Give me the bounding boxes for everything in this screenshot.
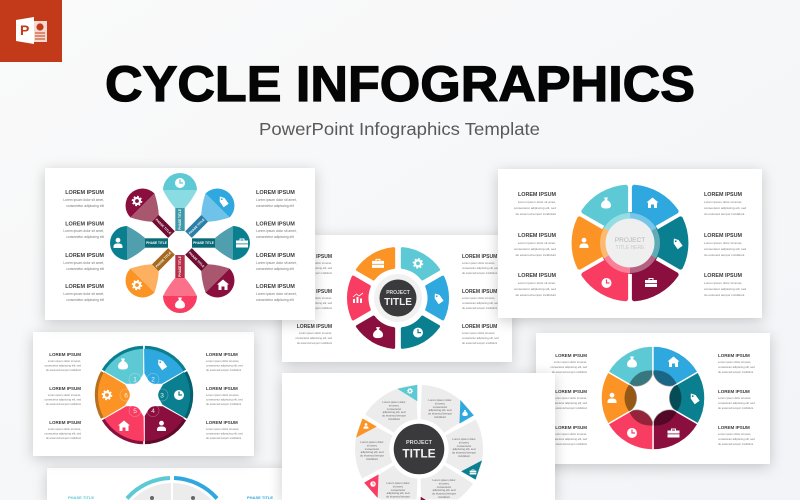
- wheel: [94, 339, 194, 451]
- wedge copy: adipiscing elit, sed: [453, 447, 476, 451]
- left labels: consectetur adipiscing elit: [66, 298, 104, 302]
- right labels: Lorem ipsum dolor sit amet,: [704, 200, 742, 204]
- cyan arc: [127, 478, 170, 498]
- left labels: do eiusmod tempor incididunt: [46, 402, 81, 406]
- segment blue: [638, 340, 702, 397]
- petal E teal: [192, 226, 250, 260]
- panel: title-here cycle, upper right: [498, 169, 762, 318]
- left labels: [295, 254, 332, 345]
- wheel: [574, 182, 686, 304]
- wedge copy: incididunt: [438, 495, 450, 499]
- right labels: Lorem ipsum dolor sit amet,: [718, 432, 751, 436]
- left labels: Lorem ipsum dolor sit amet,: [63, 198, 104, 202]
- left labels: consectetur adipiscing elit, sed: [44, 364, 81, 368]
- phase titles: PHASE TITLE: [155, 218, 172, 235]
- right labels: consectetur adipiscing elit: [256, 267, 294, 271]
- wedge copy: Lorem ipsum dolor: [428, 398, 452, 402]
- wedge copy: do eiusmod tempor: [386, 495, 410, 499]
- panel: project title cycle, centre: [282, 235, 512, 362]
- segment blue: [609, 182, 679, 255]
- left labels: LOREM IPSUM: [518, 192, 556, 198]
- numbers and icons: 2: [151, 377, 155, 384]
- left labels: Lorem ipsum dolor sit amet,: [48, 393, 81, 397]
- right labels: consectetur adipiscing elit, sed: [206, 398, 243, 402]
- left labels: consectetur adipiscing elit, sed: [44, 432, 81, 436]
- segment teal: [669, 372, 705, 424]
- right labels: LOREM IPSUM: [206, 386, 238, 391]
- left labels: do eiusmod tempor incididunt: [297, 306, 332, 310]
- right labels: consectetur adipiscing elit, sed: [462, 301, 499, 305]
- wedge copy: sit amet,: [393, 484, 404, 488]
- left labels: Lorem ipsum dolor sit amet,: [299, 331, 332, 335]
- right labels: Lorem ipsum dolor sit amet,: [704, 281, 742, 285]
- panel: phase arcs, bottom left: [47, 468, 287, 500]
- card: [498, 169, 762, 318]
- right labels: LOREM IPSUM: [256, 222, 295, 228]
- petal NW maroon: [118, 181, 184, 247]
- left labels: Lorem ipsum dolor sit amet,: [299, 296, 332, 300]
- wedge copy: do eiusmod tempor: [452, 451, 476, 455]
- left labels: do eiusmod tempor incididunt: [552, 442, 587, 446]
- left labels: Lorem ipsum dolor sit amet,: [48, 427, 81, 431]
- phase titles: [146, 209, 214, 277]
- wedge copy: Lorem ipsum dolor: [382, 400, 406, 404]
- left labels: Lorem ipsum dolor sit amet,: [518, 200, 556, 204]
- numbers and icons: 5: [133, 408, 137, 415]
- wedge copy: sit amet,: [439, 481, 450, 485]
- wedge copy: incididunt: [366, 457, 378, 461]
- right labels: Lorem ipsum dolor sit amet,: [256, 229, 297, 233]
- left labels: do eiusmod tempor incididunt: [297, 341, 332, 345]
- wedge copy: adipiscing elit, sed: [387, 491, 410, 495]
- right labels: [256, 190, 297, 302]
- numbers and icons: 3: [160, 392, 164, 399]
- segment cyan: [394, 245, 441, 284]
- right labels: consectetur adipiscing elit, sed: [718, 401, 755, 405]
- left labels: [550, 353, 587, 446]
- left labels: LOREM IPSUM: [49, 420, 81, 425]
- phase titles: PHASE TITLE: [188, 218, 205, 235]
- left labels: [63, 190, 104, 302]
- right labels: Lorem ipsum dolor sit amet,: [462, 331, 495, 335]
- left labels: LOREM IPSUM: [555, 353, 587, 358]
- segment orange: [574, 219, 630, 267]
- wedge copy: adipiscing elit, sed: [433, 488, 456, 492]
- hub: [394, 424, 444, 474]
- left labels: consectetur adipiscing elit: [66, 204, 104, 208]
- segment teal: [630, 219, 686, 267]
- right labels: consectetur adipiscing elit, sed: [704, 287, 746, 291]
- panel: grey wheel with text, bottom centre: [282, 373, 555, 500]
- wedge copy: sit amet,: [435, 401, 446, 405]
- right labels: Lorem ipsum dolor sit amet,: [256, 198, 297, 202]
- left labels: LOREM IPSUM: [555, 425, 587, 430]
- right labels: Lorem ipsum dolor sit amet,: [206, 359, 239, 363]
- right labels: LOREM IPSUM: [704, 273, 743, 279]
- right labels: [718, 353, 755, 446]
- left labels: consectetur adipiscing elit, sed: [514, 247, 556, 251]
- left labels: Lorem ipsum dolor sit amet,: [518, 281, 556, 285]
- left labels: do eiusmod tempor incididunt: [552, 406, 587, 410]
- right labels: [462, 254, 499, 345]
- logo: PowerPoint badge: [0, 0, 62, 62]
- left labels: LOREM IPSUM: [518, 273, 556, 279]
- wedge copy: do eiusmod tempor: [360, 454, 384, 458]
- segment maroon: [609, 231, 679, 304]
- left labels: LOREM IPSUM: [297, 289, 332, 295]
- left labels: LOREM IPSUM: [297, 254, 332, 260]
- petal SW orange: [118, 239, 184, 305]
- right labels: LOREM IPSUM: [704, 192, 743, 198]
- left labels: consectetur adipiscing elit, sed: [550, 437, 587, 441]
- card: [33, 332, 254, 456]
- left labels: consectetur adipiscing elit, sed: [550, 401, 587, 405]
- left labels: [44, 352, 81, 440]
- left labels: LOREM IPSUM: [49, 352, 81, 357]
- segment 4 maroon: [129, 394, 191, 451]
- segment pink: [348, 277, 369, 319]
- wedge copy: Lorem ipsum dolor: [432, 478, 456, 482]
- right labels: [704, 192, 746, 297]
- wedge copy: consectetur: [365, 447, 379, 451]
- wedge copy: incididunt: [388, 417, 400, 421]
- numbers and icons: [102, 358, 184, 431]
- left labels: do eiusmod tempor incididunt: [46, 436, 81, 440]
- left labels: consectetur adipiscing elit: [66, 267, 104, 271]
- left labels: Lorem ipsum dolor sit amet,: [63, 261, 104, 265]
- left labels: LOREM IPSUM: [297, 324, 332, 330]
- icons: [580, 198, 683, 288]
- right labels: Lorem ipsum dolor sit amet,: [256, 261, 297, 265]
- left labels: consectetur adipiscing elit, sed: [44, 398, 81, 402]
- wedge copy: incididunt: [458, 454, 470, 458]
- segment 5 pink: [97, 394, 159, 451]
- left labels: Lorem ipsum dolor sit amet,: [554, 360, 587, 364]
- right labels: LOREM IPSUM: [462, 254, 497, 260]
- segment cyan: [604, 340, 668, 397]
- segment maroon: [638, 399, 702, 456]
- right labels: do eiusmod tempor incididunt: [206, 436, 241, 440]
- segment maroon: [355, 312, 402, 351]
- hub: TITLE: [402, 446, 436, 460]
- right labels: consectetur adipiscing elit, sed: [704, 206, 746, 210]
- wedge copy: Lorem ipsum dolor: [386, 481, 410, 485]
- hub: [600, 213, 660, 273]
- card: [282, 235, 512, 362]
- right labels: LOREM IPSUM: [206, 352, 238, 357]
- label right: PHASE TITLE: [247, 495, 273, 500]
- panel: star cycle, lower right: [536, 333, 770, 464]
- segment pink: [604, 399, 668, 456]
- phase titles: PHASE TITLE: [178, 256, 182, 277]
- icons: [353, 259, 444, 338]
- segment 1 cyan: [97, 339, 159, 396]
- wedge copy: Lorem ipsum dolor: [452, 437, 476, 441]
- right labels: LOREM IPSUM: [462, 289, 497, 295]
- left labels: Lorem ipsum dolor sit amet,: [48, 359, 81, 363]
- wedge copy: consectetur: [387, 407, 401, 411]
- left labels: Lorem ipsum dolor sit amet,: [554, 432, 587, 436]
- left labels: LOREM IPSUM: [49, 386, 81, 391]
- left labels: consectetur adipiscing elit, sed: [550, 365, 587, 369]
- phase titles: PHASE TITLE: [193, 241, 214, 245]
- right labels: consectetur adipiscing elit, sed: [206, 364, 243, 368]
- wedge copy: adipiscing elit, sed: [429, 408, 452, 412]
- wedge copy: Lorem ipsum dolor: [360, 440, 384, 444]
- subtitle: PowerPoint Infographics Template: [259, 119, 540, 139]
- card: [45, 168, 315, 320]
- left labels: Lorem ipsum dolor sit amet,: [518, 241, 556, 245]
- left labels: consectetur adipiscing elit, sed: [514, 206, 556, 210]
- right labels: consectetur adipiscing elit, sed: [462, 266, 499, 270]
- petal W teal: [110, 226, 168, 260]
- right labels: LOREM IPSUM: [256, 190, 295, 196]
- phase titles: PHASE TITLE: [178, 209, 182, 230]
- wedge copy: consectetur: [457, 444, 471, 448]
- right labels: do eiusmod tempor incididunt: [704, 212, 745, 216]
- right labels: Lorem ipsum dolor sit amet,: [718, 360, 751, 364]
- right labels: consectetur adipiscing elit: [256, 235, 294, 239]
- right labels: LOREM IPSUM: [718, 425, 750, 430]
- right labels: consectetur adipiscing elit, sed: [704, 247, 746, 251]
- phase titles: PHASE TITLE: [146, 241, 167, 245]
- panel: numbered cycle, lower left: [33, 332, 254, 456]
- grey wheel: [355, 379, 483, 500]
- right labels: Lorem ipsum dolor sit amet,: [462, 296, 495, 300]
- wedge copy: sit amet,: [459, 440, 470, 444]
- right labels: LOREM IPSUM: [462, 324, 497, 330]
- right labels: Lorem ipsum dolor sit amet,: [206, 393, 239, 397]
- petal SE maroon: [176, 239, 242, 305]
- left labels: Lorem ipsum dolor sit amet,: [63, 229, 104, 233]
- right labels: consectetur adipiscing elit, sed: [462, 336, 499, 340]
- right labels: LOREM IPSUM: [256, 253, 295, 259]
- left labels: LOREM IPSUM: [65, 190, 104, 196]
- segment teal: [394, 312, 441, 351]
- numbers and icons: 1: [133, 377, 137, 384]
- icons: [114, 178, 248, 308]
- right labels: do eiusmod tempor incididunt: [718, 370, 753, 374]
- left labels: Lorem ipsum dolor sit amet,: [554, 396, 587, 400]
- segment pink: [581, 231, 651, 304]
- wheel: [348, 245, 448, 351]
- left labels: do eiusmod tempor incididunt: [516, 212, 556, 216]
- wheel: [601, 340, 705, 456]
- right labels: do eiusmod tempor incididunt: [718, 406, 753, 410]
- right labels: do eiusmod tempor incididunt: [462, 271, 497, 275]
- right labels: LOREM IPSUM: [718, 353, 750, 358]
- right labels: Lorem ipsum dolor sit amet,: [256, 292, 297, 296]
- triangles: [352, 385, 486, 500]
- segment orange: [355, 245, 402, 284]
- wedge copy: adipiscing elit, sed: [361, 450, 384, 454]
- wedge copy: do eiusmod tempor: [382, 414, 406, 418]
- segment orange: [601, 372, 637, 424]
- icons: [608, 356, 700, 438]
- numbers and icons: 4: [151, 408, 155, 415]
- petal NE blue: [176, 181, 242, 247]
- hub: [374, 274, 422, 322]
- right labels: do eiusmod tempor incididunt: [462, 341, 497, 345]
- left labels: Lorem ipsum dolor sit amet,: [299, 261, 332, 265]
- segment 6 orange: [94, 370, 130, 420]
- triangle icons: [364, 388, 476, 487]
- right labels: do eiusmod tempor incididunt: [704, 293, 745, 297]
- right labels: consectetur adipiscing elit: [256, 298, 294, 302]
- icon: small marker left: [150, 496, 154, 500]
- hub: PROJECT: [386, 290, 410, 296]
- left labels: do eiusmod tempor incididunt: [516, 253, 556, 257]
- left labels: consectetur adipiscing elit: [66, 235, 104, 239]
- wedge copy: consectetur: [391, 488, 405, 492]
- segment cyan: [581, 182, 651, 255]
- left labels: do eiusmod tempor incididunt: [46, 368, 81, 372]
- right labels: LOREM IPSUM: [704, 233, 743, 239]
- wedge copy: [360, 398, 476, 499]
- wedge copy: incididunt: [434, 415, 446, 419]
- left labels: LOREM IPSUM: [518, 233, 556, 239]
- divider: [171, 478, 173, 500]
- right labels: Lorem ipsum dolor sit amet,: [206, 427, 239, 431]
- icon: small marker right: [191, 496, 195, 500]
- wedge copy: consectetur: [433, 405, 447, 409]
- phase titles: PHASE TITLE: [188, 251, 205, 268]
- label left: PHASE TITLE: [68, 495, 94, 500]
- petal S pink: [163, 255, 197, 313]
- right labels: LOREM IPSUM: [206, 420, 238, 425]
- panel: petal cycle, upper left: [45, 168, 315, 320]
- right labels: LOREM IPSUM: [256, 284, 295, 290]
- segment blue: [427, 277, 448, 319]
- right labels: consectetur adipiscing elit, sed: [718, 365, 755, 369]
- right labels: do eiusmod tempor incididunt: [206, 402, 241, 406]
- card: [282, 373, 555, 500]
- right labels: consectetur adipiscing elit, sed: [718, 437, 755, 441]
- left labels: consectetur adipiscing elit, sed: [295, 336, 332, 340]
- left labels: consectetur adipiscing elit, sed: [295, 301, 332, 305]
- right labels: do eiusmod tempor incididunt: [462, 306, 497, 310]
- right labels: Lorem ipsum dolor sit amet,: [718, 396, 751, 400]
- left labels: LOREM IPSUM: [555, 389, 587, 394]
- wedge copy: adipiscing elit, sed: [383, 410, 406, 414]
- hub: TITLE: [384, 297, 412, 308]
- blue arc: [174, 478, 217, 498]
- petal top cyan: [163, 173, 197, 231]
- numbers and icons: 6: [124, 392, 128, 399]
- right labels: do eiusmod tempor incididunt: [206, 368, 241, 372]
- title: CYCLE INFOGRAPHICS: [105, 56, 695, 112]
- left labels: LOREM IPSUM: [65, 253, 104, 259]
- grey disc: [132, 483, 212, 500]
- left labels: consectetur adipiscing elit, sed: [295, 266, 332, 270]
- wedge copy: sit amet,: [367, 443, 378, 447]
- right labels: consectetur adipiscing elit, sed: [206, 432, 243, 436]
- segment 2 blue: [129, 339, 191, 396]
- left labels: LOREM IPSUM: [65, 222, 104, 228]
- right labels: do eiusmod tempor incididunt: [718, 442, 753, 446]
- left labels: do eiusmod tempor incididunt: [297, 271, 332, 275]
- hub: PROJECT: [406, 440, 433, 446]
- left labels: do eiusmod tempor incididunt: [516, 293, 556, 297]
- card: [47, 468, 287, 500]
- logo: PowerPoint badge: P: [20, 22, 29, 38]
- right labels: do eiusmod tempor incididunt: [704, 253, 745, 257]
- left labels: Lorem ipsum dolor sit amet,: [63, 292, 104, 296]
- right labels: Lorem ipsum dolor sit amet,: [704, 241, 742, 245]
- segment 3 teal: [158, 370, 194, 420]
- wedge copy: consectetur: [437, 485, 451, 489]
- hub: TITLE HERE: [616, 245, 645, 251]
- wedge copy: do eiusmod tempor: [432, 492, 456, 496]
- wedge copy: sit amet,: [389, 403, 400, 407]
- hub: PROJECT: [615, 237, 645, 244]
- phase titles: PHASE TITLE: [155, 251, 172, 268]
- right labels: consectetur adipiscing elit: [256, 204, 294, 208]
- right labels: [206, 352, 243, 440]
- right labels: LOREM IPSUM: [718, 389, 750, 394]
- left labels: consectetur adipiscing elit, sed: [514, 287, 556, 291]
- petals: [110, 173, 250, 313]
- right labels: Lorem ipsum dolor sit amet,: [462, 261, 495, 265]
- left labels: do eiusmod tempor incididunt: [552, 370, 587, 374]
- card: [536, 333, 770, 464]
- wedge copy: do eiusmod tempor: [428, 412, 452, 416]
- left labels: LOREM IPSUM: [65, 284, 104, 290]
- left labels: [514, 192, 556, 297]
